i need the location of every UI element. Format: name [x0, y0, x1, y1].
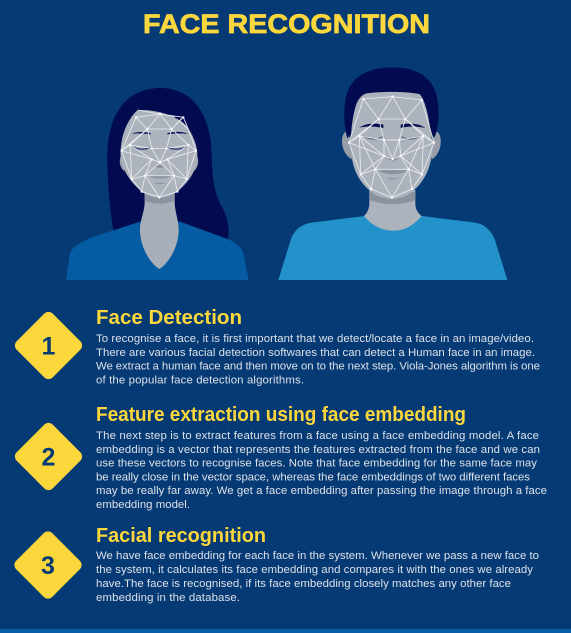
- woman ears: [120, 155, 127, 171]
- man face: [351, 92, 433, 199]
- text: feature extraction description: [96, 430, 547, 511]
- step 1 panel: [12, 307, 540, 386]
- text: face detection description: To recognise a face, it is first important that we detect/locate a face in an image/video.: [96, 333, 534, 345]
- text: face detection description: [96, 333, 540, 386]
- icon: number 3 diamond: [12, 529, 84, 601]
- illustration: man with face mesh: [278, 67, 507, 280]
- text: feature extraction description: embedding is a vector that represents the features extracted from the face and we can: [96, 444, 540, 456]
- heading: face detection: Face Detection: [96, 307, 242, 329]
- man closed eyes: [363, 136, 383, 139]
- woman closed eyes: [132, 146, 151, 149]
- man face mesh: [348, 96, 435, 199]
- icon: number 1 diamond: 1: [42, 332, 56, 360]
- man neck: [364, 190, 422, 231]
- text: face detection description: We extract a human face and then move on to the next step. Viola-Jones algorithm is one: [96, 360, 540, 372]
- text: facial recognition description: [96, 550, 539, 604]
- man ears: [342, 132, 353, 159]
- text: facial recognition description: the system, it calculates its face embedding and compares it with the ones we already: [96, 564, 533, 576]
- illustration: woman with face mesh: [66, 88, 249, 280]
- woman face mesh: [121, 110, 197, 198]
- text: feature extraction description: be really close in the vector space, whereas the face embeddings of two different faces: [96, 472, 530, 484]
- woman blue top: [66, 222, 249, 280]
- heading: feature extraction: Feature extraction using face embedding: [96, 404, 466, 426]
- text: face detection description: of the popular face detection algorithms.: [96, 374, 304, 386]
- title: FACE RECOGNITION: [143, 9, 430, 39]
- text: face detection description: There are various facial detection softwares that can detect a Human face in an image.: [96, 347, 535, 359]
- heading: facial recognition: Facial recognition: [96, 525, 266, 547]
- text: feature extraction description: use these vectors to recognise faces. Note that face embedding for the same face may: [96, 458, 537, 470]
- woman lips: [149, 175, 171, 178]
- icon: number 1 diamond: [12, 309, 85, 382]
- man nose: [387, 157, 399, 161]
- text: feature extraction description: The next step is to extract features from a face using a face embedding model. A face: [96, 430, 539, 442]
- icon: number 3 diamond: 3: [41, 552, 55, 580]
- step 3 panel: [12, 525, 539, 604]
- man hair: [344, 67, 439, 138]
- woman hair: [107, 88, 229, 240]
- text: facial recognition description: We have face embedding for each face in the system. Whenever we pass a new face to: [96, 550, 539, 562]
- text: facial recognition description: embedding in the database.: [96, 592, 240, 604]
- text: feature extraction description: embedding model.: [96, 499, 190, 511]
- text: facial recognition description: have.The face is recognised, if its face embedding closely matches any other face: [96, 578, 511, 590]
- man eyebrows: [359, 124, 383, 128]
- text: feature extraction description: may be really far away. We get a face embedding after passing the image through a face: [96, 485, 547, 497]
- step 2 panel: [12, 404, 547, 511]
- man blue shirt: [278, 216, 507, 280]
- woman eyebrows: [132, 132, 151, 134]
- woman neck: [140, 193, 179, 269]
- icon: number 2 diamond: [12, 420, 85, 493]
- man lips: [378, 169, 407, 174]
- woman nose: [155, 165, 165, 168]
- icon: number 2 diamond: 2: [42, 444, 55, 472]
- woman face: [121, 110, 197, 197]
